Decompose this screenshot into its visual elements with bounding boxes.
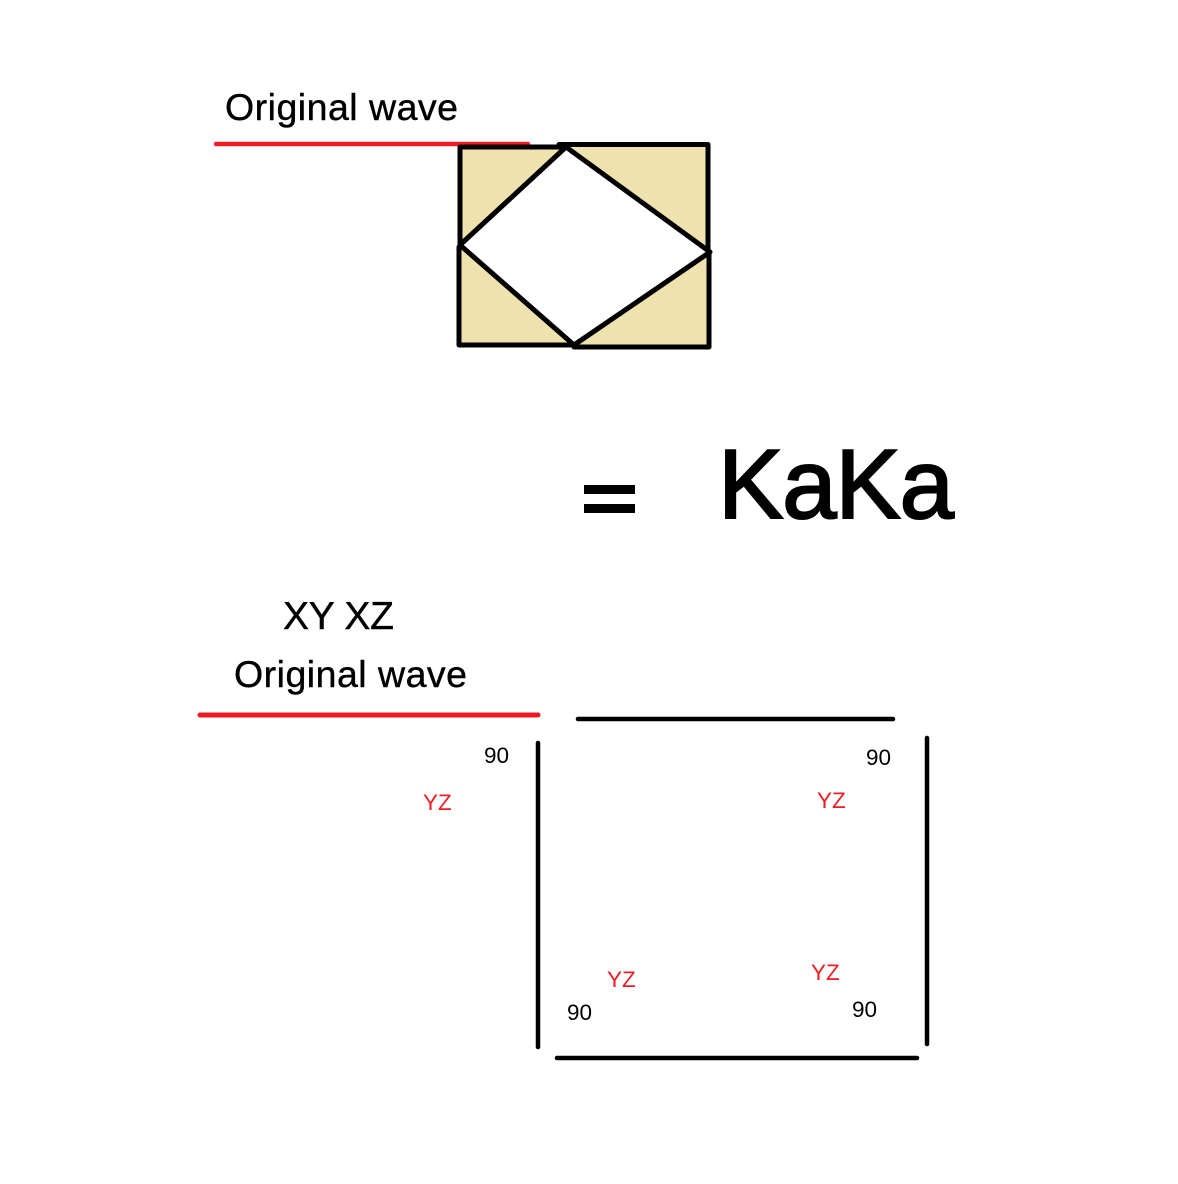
- white diamond: [460, 147, 709, 345]
- label: XY XZ: XY XZ: [283, 595, 394, 638]
- angle labels: 90: [484, 743, 891, 1025]
- KaKa label: KaKa: [718, 429, 954, 539]
- plane labels: YZ: YZ: [817, 788, 846, 813]
- broken square of four sides: [538, 719, 927, 1058]
- bottom red line: [200, 712, 538, 718]
- plane labels: YZ: YZ: [811, 960, 840, 985]
- square outline: [459, 144, 709, 347]
- diamond outline: [460, 147, 710, 345]
- plane labels: YZ: YZ: [423, 790, 452, 815]
- angle labels: 90: 90: [567, 1000, 592, 1025]
- tan corner fill: [459, 145, 709, 347]
- angle labels: 90: 90: [866, 745, 891, 770]
- top label: Original wave: Original wave: [225, 86, 458, 128]
- top red line: [216, 142, 528, 146]
- plane labels: YZ: [423, 788, 846, 992]
- diagram: square with inscribed diamond: [459, 144, 710, 347]
- angle labels: 90: 90: [484, 743, 509, 768]
- equals sign: [584, 485, 635, 513]
- plane labels: YZ: YZ: [607, 967, 636, 992]
- angle labels: 90: 90: [852, 997, 877, 1022]
- bottom label: Original wave: Original wave: [234, 653, 467, 695]
